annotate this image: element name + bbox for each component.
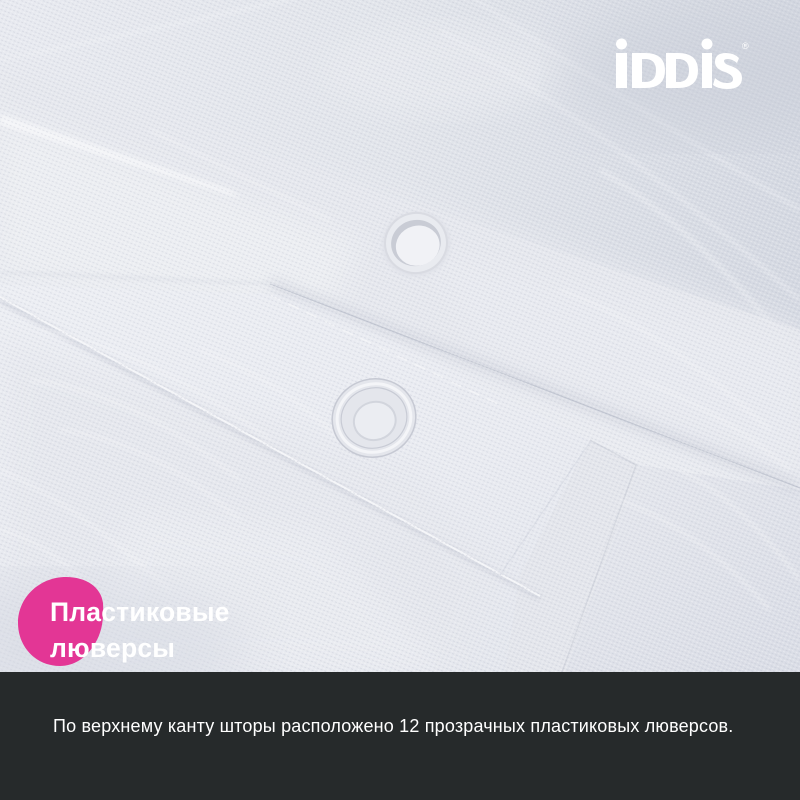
palm leaf jacquard stripes <box>0 130 800 610</box>
lower hem band <box>0 285 640 672</box>
main hem band with upper grommet <box>0 60 800 490</box>
fold shadow lines <box>0 272 800 672</box>
icon: upper transparent grommet <box>375 204 457 284</box>
right lower panel <box>565 465 800 672</box>
heading: люверсы <box>50 633 175 663</box>
icon: lower transparent grommet <box>323 369 425 467</box>
footer panel <box>0 672 800 800</box>
heading: Пластиковые <box>50 597 230 627</box>
logo: iDDiS wordmark: ® <box>742 41 749 51</box>
logo: iDDiS wordmark <box>616 38 749 89</box>
heading <box>50 597 230 663</box>
icon: pink blob behind heading <box>18 577 104 666</box>
footer text: По верхнему канту шторы расположено 12 прозрачных пластиковых люверсов. <box>53 716 734 736</box>
upper curtain panel <box>0 0 800 360</box>
